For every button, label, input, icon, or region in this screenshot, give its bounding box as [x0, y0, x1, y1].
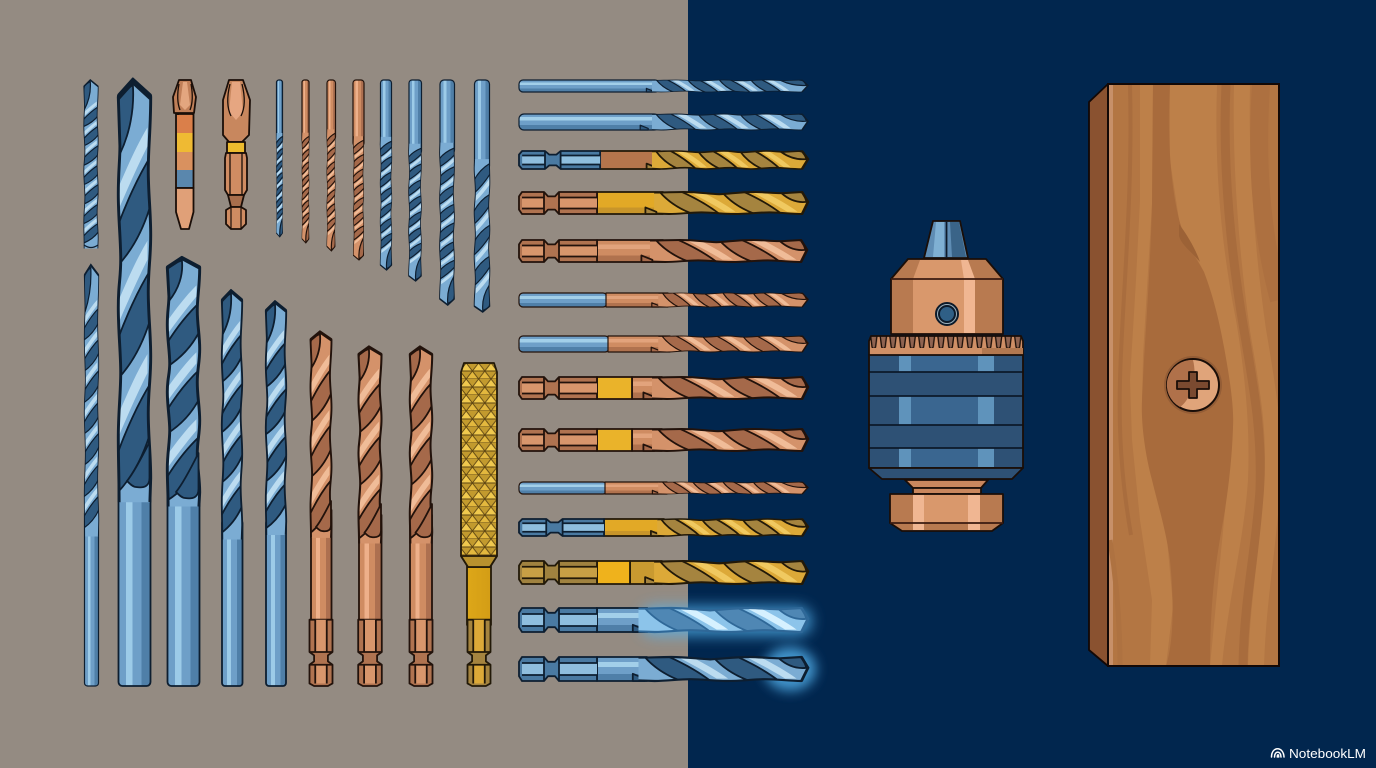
- horizontal bit row 11 gold with blue hex: [519, 518, 808, 537]
- wood outline: [1108, 84, 1279, 666]
- gold rasp bit: [461, 363, 497, 686]
- NotebookLM watermark: [1272, 746, 1366, 761]
- wood side face: [1089, 84, 1108, 666]
- drill chuck: [869, 221, 1023, 531]
- small blue twist bit top left: [83, 80, 99, 248]
- horizontal bit row 3 gold with blue hex: [519, 150, 808, 170]
- icon: NotebookLM logo: [1272, 749, 1284, 757]
- thin blue bit: [408, 80, 422, 281]
- medium blue twist bit: [221, 291, 243, 686]
- medium large blue twist bit: [166, 258, 201, 686]
- medium blue twist bit: [265, 302, 287, 686]
- horizontal bit row 5 copper: [519, 239, 807, 263]
- group: vertical drill bits: [83, 80, 497, 686]
- phillips bit banded: [173, 80, 196, 229]
- thin blue bit: [473, 80, 491, 312]
- horizontal bit row 6 blue and copper: [519, 292, 808, 308]
- wordmark: NotebookLM: [1289, 746, 1366, 761]
- icon: screw head: [1164, 356, 1222, 414]
- chuck jaws cone: [924, 221, 968, 258]
- copper bit with hex shank: [409, 347, 433, 686]
- thin blue bit: [380, 80, 392, 270]
- horizontal bit row 10 blue and copper: [519, 481, 808, 495]
- group: horizontal drill bits: [519, 79, 816, 691]
- glowing horizontal bit row 13: [519, 606, 812, 636]
- group: thin graduated bits and driver bits: [173, 80, 491, 312]
- thin copper bit: [326, 80, 336, 251]
- horizontal bit row 4 gold with copper hex: [519, 191, 808, 215]
- thin blue bit: [439, 80, 455, 305]
- background: grey panel: [0, 0, 688, 768]
- copper bit with hex shank: [357, 347, 383, 686]
- wood front face with grain: [1108, 84, 1279, 666]
- horizontal bit row 12 gold: [519, 560, 808, 585]
- chuck gear ring: [869, 336, 1023, 355]
- thin copper bit: [353, 80, 364, 260]
- thin blue bit: [276, 80, 283, 237]
- phillips bit hex shank: [223, 80, 250, 229]
- large blue twist bit: [117, 81, 152, 686]
- background: navy panel: [688, 0, 1376, 768]
- horizontal bit row 2 blue: [519, 113, 808, 131]
- chuck copper base: [890, 480, 1003, 531]
- horizontal bit row 8 copper with gold band: [519, 376, 808, 400]
- thin copper bit: [302, 80, 309, 243]
- long thin blue bit: [84, 265, 99, 686]
- chuck copper head: [891, 259, 1003, 334]
- wood block: [1089, 84, 1279, 666]
- horizontal bit row 7 blue and copper: [519, 335, 808, 353]
- horizontal bit row 1 blue: [519, 79, 808, 93]
- chuck blue sleeve: [869, 355, 1023, 479]
- horizontal bit row 9 copper with gold band: [519, 428, 808, 452]
- glowing horizontal bit row 14: [519, 647, 816, 691]
- copper bit with hex shank: [309, 332, 333, 686]
